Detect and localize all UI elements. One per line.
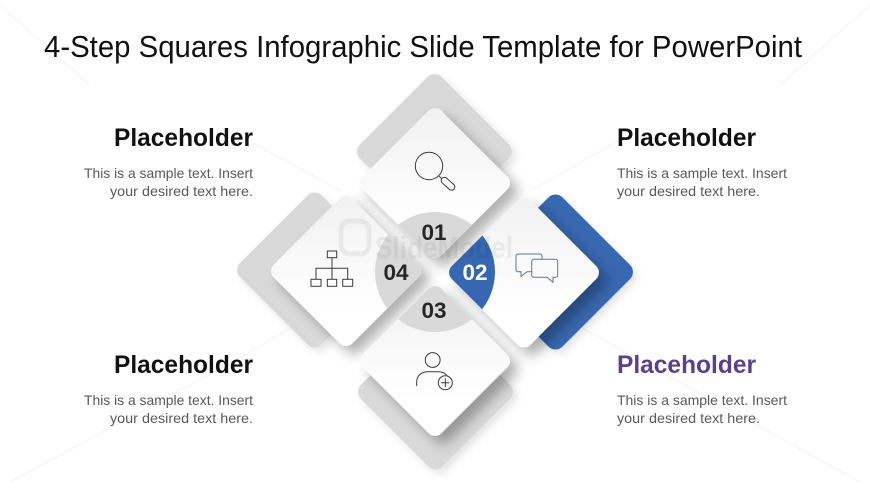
number 01: 01 xyxy=(421,220,447,245)
wedge 04 xyxy=(375,234,421,308)
text block: bottom left: Placeholder xyxy=(114,351,253,379)
text block: bottom right: your desired text here. xyxy=(617,410,760,426)
wedge 03 xyxy=(398,286,472,332)
icon: add user xyxy=(417,353,452,390)
wedge 01 xyxy=(398,212,472,258)
icon: chat bubbles xyxy=(516,254,558,282)
text block: top right: This is a sample text. Insert xyxy=(617,165,787,181)
text block: top left: This is a sample text. Insert xyxy=(84,165,253,181)
title: 4-Step Squares Infographic Slide Template for PowerPoint xyxy=(44,29,802,64)
text block: bottom right: This is a sample text. Insert xyxy=(617,392,787,408)
front square: right xyxy=(445,194,603,351)
front square: left xyxy=(267,192,425,350)
text block: bottom left xyxy=(84,351,253,426)
text block: bottom left: This is a sample text. Insert xyxy=(84,392,253,408)
text block: bottom right xyxy=(617,351,787,426)
text block: bottom left: your desired text here. xyxy=(110,410,253,426)
number 03: 03 xyxy=(421,298,447,323)
watermark xyxy=(341,221,513,265)
front square: top xyxy=(356,104,514,262)
text block: top left: your desired text here. xyxy=(110,183,253,199)
text block: top right: your desired text here. xyxy=(617,183,760,199)
back square: bottom xyxy=(354,310,517,474)
back square: right blue xyxy=(474,190,637,354)
text block: top right xyxy=(617,124,787,199)
number 02: 02 xyxy=(462,260,488,285)
text block: top right: Placeholder xyxy=(617,124,756,152)
number 04: 04 xyxy=(383,260,409,285)
front square: bottom xyxy=(356,282,514,440)
wedge 02 blue xyxy=(449,236,495,310)
icon: magnifier xyxy=(415,152,456,192)
text block: top left: Placeholder xyxy=(114,124,253,152)
text block: top left xyxy=(84,124,253,199)
back square: top xyxy=(353,70,516,233)
back square: left xyxy=(233,188,396,352)
watermark: SlideModel xyxy=(375,230,513,265)
text block: bottom right: Placeholder xyxy=(617,351,756,379)
icon: org chart xyxy=(311,251,353,286)
